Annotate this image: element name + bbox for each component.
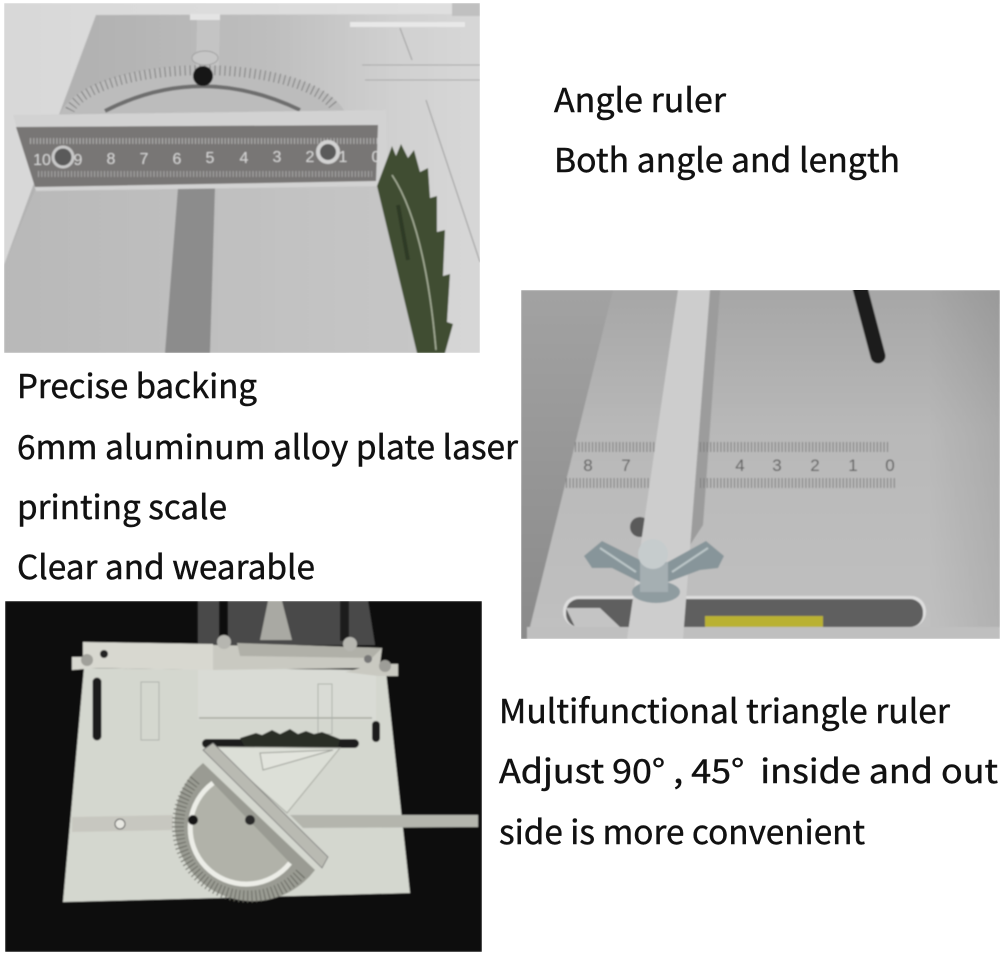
text: precise backing caption: Clear and wearable xyxy=(17,541,315,589)
aluminum plate xyxy=(527,290,1000,639)
panel: photo of angle ruler on saw table: 6 xyxy=(173,151,182,168)
printed scale ticks xyxy=(575,442,888,452)
panel: photo of angle ruler on saw table xyxy=(4,3,480,353)
panel: photo of laser printed scale with wing nut: 7 xyxy=(621,456,631,475)
long slot xyxy=(563,596,926,627)
triangle ruler xyxy=(213,747,340,813)
slots xyxy=(92,682,102,736)
horizontal bar xyxy=(72,815,173,832)
fence bars xyxy=(72,642,213,670)
protractor xyxy=(60,66,345,114)
text: precise backing caption: Precise backing xyxy=(17,360,257,408)
panel: photo of laser printed scale with wing nut: 2 xyxy=(810,456,820,475)
text: precise backing caption: 6mm aluminum alloy plate laser xyxy=(17,421,518,469)
printed scales xyxy=(141,682,159,740)
lower plate with slot xyxy=(64,187,416,352)
text: multifunctional triangle ruler caption xyxy=(499,685,998,854)
panel: photo of angle ruler on saw table: 9 xyxy=(74,152,83,169)
table plate xyxy=(63,668,410,902)
text: multifunctional triangle ruler caption: side is more convenient xyxy=(499,806,865,854)
clear rear guard xyxy=(198,601,375,645)
panel: photo of triangle ruler and protractor on table xyxy=(5,601,482,952)
panel: photo of laser printed scale with wing nut: 3 xyxy=(772,456,782,475)
panel: photo of laser printed scale with wing nut: 4 xyxy=(735,456,745,475)
blade slot xyxy=(860,288,878,356)
panel: photo of angle ruler on saw table: 0 xyxy=(372,149,381,166)
saw table upper surface xyxy=(4,14,480,353)
text: angle ruler caption: Both angle and length xyxy=(554,134,900,182)
saw blade xyxy=(377,144,453,353)
panel: photo of angle ruler on saw table: 8 xyxy=(107,151,116,168)
panel: photo of angle ruler on saw table: 3 xyxy=(273,149,282,166)
panel: photo of laser printed scale with wing nut: 8 xyxy=(583,456,593,475)
panel: photo of laser printed scale with wing nut: 0 xyxy=(885,456,895,475)
panel: photo of angle ruler on saw table: 7 xyxy=(140,151,149,168)
text: precise backing caption xyxy=(17,360,518,589)
panel: photo of angle ruler on saw table: 5 xyxy=(206,150,215,167)
text: multifunctional triangle ruler caption: Adjust 90° , 45° inside and out xyxy=(499,745,998,793)
panel: photo of laser printed scale with wing nut xyxy=(521,288,1000,639)
text: angle ruler caption xyxy=(554,74,900,182)
slot shadow beside the bar xyxy=(690,290,720,545)
protractor xyxy=(175,763,315,901)
small saw blade xyxy=(240,729,340,747)
length ruler xyxy=(13,110,388,191)
panel: photo of angle ruler on saw table: 4 xyxy=(240,150,249,167)
text: multifunctional triangle ruler caption: Multifunctional triangle ruler xyxy=(499,685,950,733)
panel: photo of angle ruler on saw table: 1 xyxy=(339,149,348,166)
aluminium bar xyxy=(627,290,710,639)
panel: photo of angle ruler on saw table: 10 xyxy=(33,152,51,169)
text: angle ruler caption: Angle ruler xyxy=(554,74,726,122)
panel: photo of angle ruler on saw table: 2 xyxy=(306,149,315,166)
text: precise backing caption: printing scale xyxy=(17,481,227,529)
panel: photo of laser printed scale with wing nut: 1 xyxy=(848,456,858,475)
wing nut xyxy=(584,539,724,603)
